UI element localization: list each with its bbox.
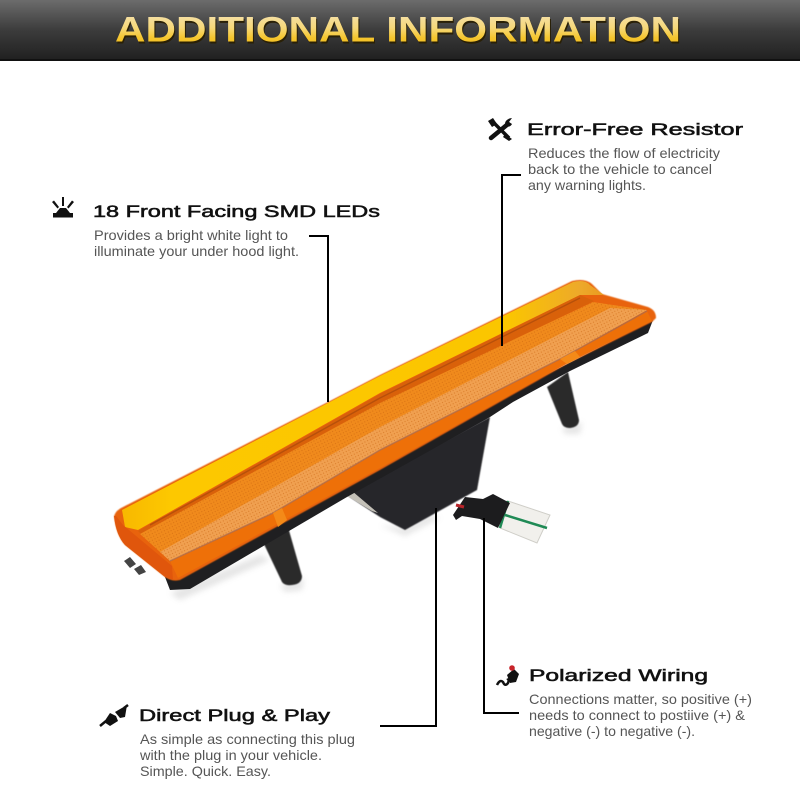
- body text: any warning lights.: [528, 177, 646, 193]
- body text: [94, 227, 299, 259]
- housing: [345, 417, 490, 530]
- product: side marker lamp: [114, 280, 656, 600]
- icon: tools: [488, 118, 512, 141]
- dark rib: [138, 295, 594, 535]
- callout line: LEDs: [309, 236, 328, 402]
- callout line: resistor: [502, 175, 521, 346]
- body text: [139, 731, 355, 779]
- wire: [456, 505, 464, 507]
- body text: As simple as connecting this plug: [140, 731, 355, 747]
- lens body: [114, 280, 656, 581]
- connector: [453, 494, 510, 528]
- body text: Connections matter, so positive (+): [529, 691, 752, 707]
- body text: needs to connect to postiive (+) &: [529, 707, 746, 723]
- title: ADDITIONAL INFORMATION: [115, 10, 681, 50]
- tabs: [124, 557, 146, 575]
- soft shadow: [170, 422, 582, 600]
- left end cap: [114, 516, 173, 580]
- yellow top wall: [122, 281, 604, 530]
- rear post right: [547, 372, 579, 428]
- heading: Polarized Wiring: [529, 666, 708, 685]
- callout line: plug: [380, 508, 436, 726]
- callout line: wiring: [484, 518, 519, 713]
- icon: plug: [100, 705, 128, 726]
- t10 bulb board: [500, 501, 550, 543]
- body text: Reduces the flow of electricity: [528, 145, 720, 161]
- body text: Simple. Quick. Easy.: [140, 763, 271, 779]
- reflector: [140, 302, 647, 561]
- reflector light band: [160, 308, 647, 561]
- heading: 18 Front Facing SMD LEDs: [93, 202, 380, 221]
- panel: LEDs: [52, 197, 380, 259]
- body text: Provides a bright white light to: [94, 227, 288, 243]
- heading: Direct Plug & Play: [139, 706, 331, 725]
- header banner: [0, 0, 800, 61]
- panel: plug: [100, 705, 355, 779]
- body text: negative (-) to negative (-).: [529, 723, 695, 739]
- heading: Error-Free Resistor: [527, 120, 743, 139]
- lens highlight: [170, 311, 647, 561]
- body text: back to the vehicle to cancel: [528, 161, 712, 177]
- reflector texture: [140, 302, 647, 561]
- base strip: [165, 320, 653, 590]
- panel: resistor: [488, 118, 743, 193]
- icon: polarized wire: [497, 665, 519, 685]
- body text: with the plug in your vehicle.: [139, 747, 322, 763]
- title: ADDITIONAL INFORMATION: [116, 12, 682, 52]
- body text: [529, 691, 752, 739]
- body text: illuminate your under hood light.: [94, 243, 299, 259]
- icon: LED beacon: [52, 197, 74, 218]
- lower lens edge: [170, 311, 652, 578]
- panel: wiring: [497, 665, 752, 739]
- rear post left: [263, 527, 302, 585]
- body text: [528, 145, 720, 193]
